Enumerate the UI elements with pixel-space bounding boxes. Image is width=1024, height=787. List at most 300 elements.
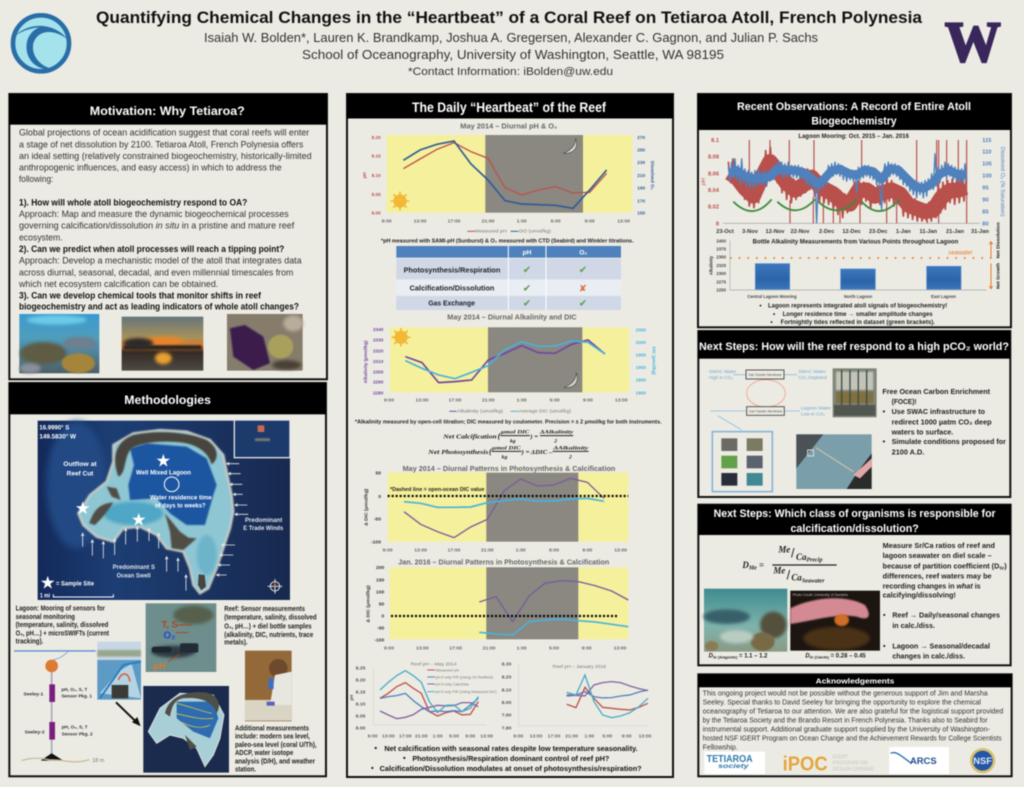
authors and affiliation: Isaiah W. Bolden*, Lauren K. Brandkamp, Joshua A. Gregersen, Alexander C. Gagnon, and Julian P. Sachs xyxy=(204,31,818,45)
chart: reef pH May 2014: Measured pH xyxy=(436,668,459,672)
logo: IPOC: PROGRAM ON xyxy=(833,761,868,767)
text block: motivation questions: 2). Can we predict when atoll processes will reach a tipping point? xyxy=(19,244,285,254)
chart: May 2014 diurnal alkalinity and DIC: 1850 xyxy=(636,378,646,383)
chart: lagoon mooring time series: 8.06 xyxy=(708,171,719,177)
text block: Sr/Ca ratios xyxy=(883,541,1007,660)
text block: lagoon mooring: tracking). xyxy=(16,638,43,645)
arrow: net growth xyxy=(989,263,993,289)
map labels: of days to weeks? xyxy=(155,502,206,509)
text block: additional measurements: station. xyxy=(235,767,256,774)
chart: reef pH May 2014: 8.15 xyxy=(356,689,366,695)
text block: additional measurements: include: modern sea level, xyxy=(235,734,310,741)
table: process sensitivity: O₂ xyxy=(579,250,587,257)
chart: reef pH January 2016: 8.10 xyxy=(502,687,512,693)
equation: partition coefficient: / xyxy=(787,568,791,582)
chart: lagoon mooring time series: 1-Jan xyxy=(896,229,911,235)
text block: Sr/Ca ratios: Sr xyxy=(999,565,1004,570)
equations: net calcification and net photosynthesis: kg xyxy=(502,454,507,460)
chart: bottle alkalinity bars: seawater xyxy=(948,251,974,257)
chart: reef pH May 2014: 8.10 xyxy=(356,702,366,708)
text block: Sr/Ca ratios: Reef → Daily/seasonal changes xyxy=(892,611,1000,620)
chart: lagoon mooring time series: 3-Nov xyxy=(742,229,759,235)
chart: lagoon mooring time series: Dissolved O₂ (% Saturation) xyxy=(999,147,1005,217)
chart: January 2016 photosynthesis and calcification: 13:00 xyxy=(614,645,627,651)
equations: net calcification and net photosynthesis xyxy=(427,430,589,460)
icon: circulation circle xyxy=(164,477,179,492)
table: process sensitivity: pH xyxy=(523,250,532,257)
photo: reef sensors: O₂ xyxy=(163,630,176,641)
equation: partition coefficient: Ca xyxy=(796,552,806,562)
chart: reef pH January 2016: 1:00 xyxy=(584,733,595,739)
text block: motivation questions: a stage of net dissolution by 2100. Tetiaroa Atoll, French Polynesia offers xyxy=(19,140,304,150)
chart: lagoon mooring time series: 90 xyxy=(982,197,989,203)
text block: Sr/Ca ratios: ) xyxy=(1004,561,1007,570)
chart: lagoon mooring time series: 8.1 xyxy=(711,138,719,144)
text block: Sr/Ca ratios: calcifying/dissolving! xyxy=(883,591,956,600)
map: Tetiaroa atoll satellite image xyxy=(38,420,290,600)
heading: high pCO2 world xyxy=(698,331,1010,359)
chart: May 2014 diurnal pH and O2: 170 xyxy=(637,198,645,203)
chart: lagoon mooring time series xyxy=(701,133,1005,235)
panel: next steps organisms xyxy=(698,505,1011,665)
chart: May 2014 diurnal pH and O2: 210 xyxy=(637,173,645,178)
chart: bottle alkalinity bars: 2250 xyxy=(716,288,727,293)
inset map xyxy=(234,420,290,458)
chart: May 2014 diurnal pH and O2: 8.15 xyxy=(372,154,381,159)
caption: photo partition coefficients: D xyxy=(709,654,714,660)
chart: reef pH May 2014: 21:00 xyxy=(415,733,428,739)
photo: researcher in lab xyxy=(245,651,292,721)
chart: May 2014 diurnal alkalinity and DIC: 17:00 xyxy=(449,398,462,404)
heading: daily heartbeat xyxy=(347,94,673,118)
panel: methodologies xyxy=(9,383,326,776)
chart: May 2014 diurnal pH and O2: 8.05 xyxy=(372,192,381,197)
chart: May 2014 photosynthesis and calcification xyxy=(364,466,628,553)
equation: partition coefficient: Me xyxy=(777,545,790,555)
text block: FOCE xyxy=(882,387,1006,456)
map labels: Water residence time xyxy=(150,495,212,502)
text block: reef sensors: (temperature, salinity, dissolved xyxy=(224,615,317,622)
text block: motivation questions: Approach: Develop a mechanistic model of the atoll that integrates data xyxy=(19,256,302,266)
heading: acknowledgements xyxy=(698,674,1012,687)
text block: motivation questions: 1). How will whole atoll biogeochemistry respond to OA? xyxy=(19,197,248,207)
chart: reef pH May 2014: 9:00 xyxy=(465,733,476,739)
chart: bottle alkalinity bars: 2325 xyxy=(716,263,727,268)
chart: May 2014 photosynthesis and calcification: 50 xyxy=(375,470,381,476)
text block: acknowledgements: Fellowship. xyxy=(703,743,738,752)
chart: lagoon mooring time series: 12-Nov xyxy=(766,229,785,235)
text block: motivation questions: biogeochemistry and act as leading indicators of whole atoll changes? xyxy=(19,302,299,312)
text block: acknowledgements: instrumental support. Additional graduate support supplied by the University of Washington- xyxy=(703,725,991,734)
chart: May 2014 diurnal pH and O2: 8.00 xyxy=(372,211,381,216)
photo: lagoon survey map xyxy=(143,686,229,773)
text block: FOCE: Use SWAC infrastructure to xyxy=(892,407,985,416)
heading: recent observations xyxy=(698,94,1011,130)
icon: scale bar xyxy=(53,594,113,597)
chart: May 2014 diurnal pH and O2: 5:00 xyxy=(551,219,561,225)
chart: January 2016 photosynthesis and calcification: Δ DIC (µmol/kg) xyxy=(365,585,371,623)
chart: reef pH May 2014: 1:00 xyxy=(433,733,443,739)
photo: experimental rack xyxy=(833,368,877,417)
chart: bottle alkalinity bars: Alkalinity xyxy=(709,255,714,275)
text block: motivation questions: 3). Can we develop chemical tools that monitor shifts in reef xyxy=(19,291,262,301)
panel: daily heartbeat of the reef xyxy=(347,94,673,777)
chart: lagoon mooring time series: Lagoon Mooring: Oct. 2015 – Jan. 2016 xyxy=(798,133,909,140)
logo: ARCS: ARCS xyxy=(910,756,937,766)
photo: purple and brown coral xyxy=(227,314,303,371)
chart: lagoon mooring time series: 2-Dec xyxy=(819,229,834,235)
text block: lagoon takeaways: • xyxy=(770,319,773,326)
chart: lagoon mooring time series: 8.04 xyxy=(708,188,720,194)
chart: bottle alkalinity bars: 2400 xyxy=(716,238,727,243)
text block: lagoon mooring: Lagoon: Mooring of sensors for xyxy=(16,606,105,613)
chart: January 2016 photosynthesis and calcification: Jan. 2016 – Diurnal Patterns in Photosynthesis & Calcification xyxy=(398,559,609,566)
diagram: gas transfer loop: SWAC Water xyxy=(798,369,826,374)
text block: Sr/Ca ratios: changes in calc./diss. xyxy=(892,651,965,660)
map labels: Predominant xyxy=(245,517,283,524)
icon: sample site stars: ★ xyxy=(75,498,90,518)
text block: motivation questions: following: xyxy=(19,174,53,184)
diagram: mooring xyxy=(14,651,105,764)
icon: wave logo xyxy=(13,15,69,71)
diagram: FOCE enclosure xyxy=(712,416,772,492)
text block: reef sensors: Reef: Sensor measurements xyxy=(224,606,305,613)
chart: reef pH January 2016: 5:00 xyxy=(602,733,613,739)
chart: lagoon mooring time series: 8.08 xyxy=(708,155,719,161)
chart: May 2014 diurnal alkalinity and DIC: 2320 xyxy=(373,348,384,353)
chart: May 2014 diurnal alkalinity and DIC: 9:00 xyxy=(384,398,394,404)
heading: motivation: Motivation: Why Tetiaroa? xyxy=(90,105,245,118)
chart: reef pH January 2016: 21:00 xyxy=(565,733,578,739)
equations: net calcification and net photosynthesis: Net Photosynthesis xyxy=(427,450,489,456)
chart: January 2016 photosynthesis and calcification: 17:00 xyxy=(449,645,462,651)
text block: FOCE: (FOCE)! xyxy=(892,397,917,406)
chart: May 2014 photosynthesis and calcification: 13:00 xyxy=(414,547,427,553)
chart: May 2014 diurnal alkalinity and DIC: 2340 xyxy=(373,327,384,332)
text block: lagoon takeaways: • xyxy=(773,311,776,318)
note: alkalinity methods: *Alkalinity measured by open-cell titration; DIC measured by coulometer. Precision = ± 2 µmol/kg for both instruments. xyxy=(355,419,662,425)
table: process sensitivity: ✔ xyxy=(523,265,531,276)
chart: reef pH January 2016: 8.00 xyxy=(502,700,512,706)
chart: May 2014 diurnal pH and O2: 190 xyxy=(637,186,645,191)
equation: partition coefficient: D xyxy=(742,560,749,570)
chart: reef pH January 2016 xyxy=(502,662,652,739)
authors and affiliation: *Contact Information: iBolden@uw.edu xyxy=(408,66,613,78)
chart: reef pH January 2016: 9:00 xyxy=(513,733,524,739)
chart: May 2014 diurnal pH and O2: 230 xyxy=(637,160,645,165)
diagram: mooring: Sensor Pkg. 1 xyxy=(61,694,92,700)
icon: sample site stars xyxy=(40,451,171,593)
text block: additional measurements: ADCP, water isotope xyxy=(235,750,293,757)
chart: bottle alkalinity bars: North Lagoon xyxy=(844,294,873,299)
chart: January 2016 photosynthesis and calcification: -50 xyxy=(377,626,385,632)
chart: May 2014 diurnal alkalinity and DIC: 1:00 xyxy=(517,398,527,404)
text block: acknowledgements: by the Tetiaroa Society and the Brando Resort in French Polynesia. Thanks also to Seabird for xyxy=(703,716,988,725)
chart: May 2014 diurnal alkalinity and DIC: 2330 xyxy=(373,338,384,343)
text block: reef sensors: O₂, pH…) + diel bottle samples xyxy=(224,623,312,630)
text block: heartbeat takeaways: Net calcification with seasonal rates despite low temperature seasonality. xyxy=(384,744,638,753)
equations: net calcification and net photosynthesis: ΔAlkalinity xyxy=(552,445,589,451)
chart: reef pH January 2016: 7.80 xyxy=(502,725,512,731)
icon: sample site stars: ★ xyxy=(156,451,171,471)
text block: reef sensors: metals). xyxy=(224,640,248,647)
chart: bottle alkalinity bars xyxy=(709,222,1001,299)
text block: heartbeat takeaways: • xyxy=(403,754,406,763)
chart: May 2014 diurnal alkalinity and DIC: 2310 xyxy=(373,359,384,364)
chart: reef pH May 2014: pH if only P/R (Using O2 Redfield) xyxy=(436,675,493,679)
chart: May 2014 diurnal alkalinity and DIC: 1900 xyxy=(636,365,646,370)
equations: net calcification and net photosynthesis: µmol DIC xyxy=(500,430,530,436)
heading: which class of organisms: calcification/dissolution? xyxy=(790,523,919,535)
chart: May 2014 diurnal pH and O2: 8.20 xyxy=(372,135,381,140)
text block: additional measurements: Additional measurements xyxy=(235,725,309,732)
text block: acknowledgements: Seeley. Special thanks to David Seeley for bringing the opportunity to explore the chemical xyxy=(703,697,981,706)
map labels: = Sample Site xyxy=(56,580,94,587)
chart: reef pH May 2014: 9:00 xyxy=(368,733,378,739)
photo: sunset over lagoon xyxy=(122,317,203,371)
chart: May 2014 diurnal pH and O2: Measured pH xyxy=(475,229,507,234)
diagram: mooring: Seeley-2 xyxy=(25,729,45,735)
chart: May 2014 photosynthesis and calcification: 21:00 xyxy=(481,547,494,553)
equation: partition coefficient: Precip xyxy=(806,558,822,564)
chart: January 2016 photosynthesis and calcification: 150 xyxy=(376,578,385,584)
icon: sample site stars: ★ xyxy=(131,509,146,529)
text block: motivation questions: which net ecosystem calcification can be obtained. xyxy=(18,279,218,289)
chart: January 2016 photosynthesis and calcification: 5:00 xyxy=(549,645,559,651)
heading: daily heartbeat: The Daily “Heartbeat” of the Reef xyxy=(412,100,606,115)
chart: lagoon mooring time series: 115 xyxy=(982,138,991,144)
chart: May 2014 photosynthesis and calcification: -50 xyxy=(374,516,381,522)
photo: aerial reef view xyxy=(796,434,872,489)
chart: bottle alkalinity bars: Bottle Alkalinity Measurements from Various Points throughout Lagoon xyxy=(753,239,958,246)
text block: lagoon takeaways: Lagoon represents integrated atoll signals of biogeochemistry! xyxy=(768,302,947,309)
equations: net calcification and net photosynthesis: ( xyxy=(489,447,493,456)
table: process sensitivity: ✔ xyxy=(579,265,587,276)
text block: motivation questions: an ideal setting (relatively constrained biogeochemistry, historically-limited xyxy=(19,151,312,161)
chart: May 2014 diurnal alkalinity and DIC: 2050 xyxy=(636,328,646,333)
text block: FOCE: redirect 1000 µatm CO₂ deep xyxy=(892,417,992,426)
text block: lagoon mooring: seasonal monitoring xyxy=(16,614,75,621)
text block: motivation questions: anthropogenic influences, and easy access) in which to address the xyxy=(19,162,282,172)
arrow: to lagoon map xyxy=(116,702,141,726)
chart: May 2014 diurnal alkalinity and DIC: Alkalinity (µmol/kg) xyxy=(363,340,368,383)
map labels: Reef Cut xyxy=(67,470,94,477)
logo: Tetiaroa Society xyxy=(704,752,765,774)
land xyxy=(115,432,217,477)
text block: Sr/Ca ratios: Measure Sr/Ca ratios of reef and xyxy=(883,541,995,550)
icon: University of Washington W logo: W xyxy=(945,11,1001,74)
table: process sensitivity: Calcification/Dissolution xyxy=(410,283,495,292)
text block: additional measurements xyxy=(235,725,317,774)
chart: January 2016 photosynthesis and calcification: -100 xyxy=(374,638,385,644)
chart: lagoon mooring time series: 80 xyxy=(982,221,989,227)
caption: photo partition coefficients: = 1.1 – 1.2 xyxy=(737,654,768,660)
chart: reef pH May 2014: 13:00 xyxy=(480,733,493,739)
chart: lagoon mooring time series: 23-Dec xyxy=(869,229,888,235)
chart: May 2014 diurnal alkalinity and DIC: 5:00 xyxy=(550,398,560,404)
text block: FOCE: Simulate conditions proposed for xyxy=(892,437,1006,446)
chart: May 2014 photosynthesis and calcification: -100 xyxy=(371,539,381,545)
chart: May 2014 diurnal pH and O2 xyxy=(362,124,655,234)
text block: Sr/Ca ratios: because of partition coefficient (D xyxy=(883,561,1001,570)
chart: bottle alkalinity bars: 2350 xyxy=(716,255,727,260)
text block: FOCE: • xyxy=(883,437,886,446)
map labels: 1 mi xyxy=(40,592,50,599)
chart: May 2014 diurnal pH and O2: 13:00 xyxy=(617,219,630,225)
chart: May 2014 diurnal pH and O2: 150 xyxy=(637,211,645,216)
diagram: gas transfer loop: CO₂ Depleted xyxy=(798,375,827,380)
panel: motivation xyxy=(9,94,327,379)
chart: May 2014 diurnal alkalinity and DIC: 2290 xyxy=(373,380,384,385)
diagram: gas transfer loop: Gas Transfer Membrane xyxy=(748,373,782,377)
text block: lagoon mooring: O₂, pH…) + microSWIFTs (current xyxy=(16,630,110,637)
arrows: ocean swell xyxy=(81,527,187,591)
equations: net calcification and net photosynthesis: 2 xyxy=(568,454,572,460)
chart: May 2014 diurnal alkalinity and DIC xyxy=(363,314,656,414)
chart: reef pH May 2014: pH xyxy=(349,695,354,701)
reef flat xyxy=(78,430,233,593)
logo: IPOC: OCEAN CHANGE xyxy=(833,767,874,773)
equations: net calcification and net photosynthesis: kg xyxy=(510,438,516,444)
text block: Sr/Ca ratios: lagoon seawater on diel scale – xyxy=(883,551,992,560)
text block: motivation questions: ecosystem. xyxy=(19,233,63,243)
logo: NSF: NSF xyxy=(973,756,992,766)
chart: bottle alkalinity bars: Net Dissolution xyxy=(995,222,1001,258)
equations: net calcification and net photosynthesis: 2 xyxy=(553,439,557,445)
chart: lagoon mooring time series: 95 xyxy=(982,185,989,191)
chart: lagoon mooring time series: 23-Oct xyxy=(716,229,734,235)
equations: net calcification and net photosynthesis: ) = ΔDIC – xyxy=(521,449,553,456)
text block: reef sensors: (alkalinity, DIC, nutrients, trace xyxy=(224,632,313,639)
map labels: Outflow at xyxy=(63,461,98,468)
diagram: gas transfer loop: SWAC Water xyxy=(709,369,737,374)
diagram: mooring: pH, O₂, S, T xyxy=(62,724,88,730)
diagram: gas transfer loop: Low in CO₂ xyxy=(801,412,825,417)
text block: Sr/Ca ratios: • xyxy=(883,641,886,650)
text block: heartbeat takeaways: Photosynthesis/Respiration dominant control of reef pH? xyxy=(412,754,610,763)
chart: May 2014 photosynthesis and calcification: 0 xyxy=(378,494,381,500)
chart: May 2014 diurnal pH and O2: Dissolved O₂ xyxy=(650,161,655,190)
text block: FOCE: Free Ocean Carbon Enrichment xyxy=(882,387,991,396)
map labels xyxy=(39,423,284,599)
icon: compass xyxy=(268,579,282,594)
chart: May 2014 photosynthesis and calcification: 5:00 xyxy=(549,547,559,553)
table: process sensitivity: ✔ xyxy=(523,283,531,294)
table: process sensitivity: ✔ xyxy=(579,298,587,309)
text block: lagoon mooring: (temperature, salinity, dissolved xyxy=(16,622,108,629)
text block: lagoon takeaways: Longer residence time → smaller amplitude changes xyxy=(783,311,933,318)
chart: lagoon mooring time series: 22-Nov xyxy=(791,229,810,235)
diagram: gas transfer loop: High in CO₂ xyxy=(709,375,733,380)
chart: May 2014 diurnal alkalinity and DIC: 1800 xyxy=(636,390,646,395)
chart: May 2014 photosynthesis and calcification: Δ DIC (µmol/kg) xyxy=(364,488,370,526)
icon: sun xyxy=(392,328,410,347)
icon: moon xyxy=(563,138,577,153)
chart: January 2016 photosynthesis and calcification: 200 xyxy=(376,565,385,571)
arrows: trade winds xyxy=(217,462,248,576)
logo: ARCS xyxy=(889,747,949,774)
photo: boat deployment xyxy=(97,642,141,700)
chart: May 2014 diurnal alkalinity and DIC: Alkalinity (umol/kg) xyxy=(457,409,504,414)
chart: bottle alkalinity bars: 2300 xyxy=(716,271,727,276)
equation: partition coefficient: Me xyxy=(748,566,757,572)
icon: sun xyxy=(391,192,409,210)
chart: bottle alkalinity bars: Central Lagoon Mooring xyxy=(747,294,797,299)
diagram: gas transfer loop: Lagoon Water xyxy=(801,406,831,411)
chart: reef pH May 2014: pH if only P/R (Using Measured DIC) xyxy=(436,690,497,694)
text block: acknowledgements: This ongoing project would not be possible without the generous support of Jim and Marsha xyxy=(703,688,989,697)
chart: reef pH May 2014: Reef pH – May 2014 xyxy=(411,661,457,666)
chart: January 2016 photosynthesis and calcification: 9:00 xyxy=(384,645,394,651)
note: pH and O2 methods: *pH measured with SAMI-pH (Sunburst) & O₂ measured with CTD (Seabird) and Winkler titrations. xyxy=(381,239,634,245)
heading: acknowledgements: Acknowledgements xyxy=(816,677,894,686)
equations: net calcification and net photosynthesis: ) = xyxy=(529,434,538,441)
chart: May 2014 diurnal pH and O2: 9:00 xyxy=(585,219,595,225)
equations: net calcification and net photosynthesis: ΔAlkalinity xyxy=(539,430,574,436)
table: process sensitivity: ✔ xyxy=(523,298,531,309)
chart: May 2014 diurnal alkalinity and DIC: 13:00 xyxy=(416,398,429,404)
text block: lagoon mooring xyxy=(16,606,110,645)
equations: net calcification and net photosynthesis: Net Calcification xyxy=(442,435,497,441)
arrow: net dissolution xyxy=(989,242,993,258)
caption: photo partition coefficients: Sr (Aragonite) xyxy=(713,656,738,660)
chart: May 2014 diurnal pH and O2: 1:00 xyxy=(517,219,527,225)
chart: reef pH January 2016: 7.90 xyxy=(502,713,512,719)
heading: recent observations: Biogeochemistry xyxy=(811,115,897,127)
chart: reef pH May 2014: 5:00 xyxy=(449,733,459,739)
text block: acknowledgements: oceanography of Tetiaroa to our attention. We are also grateful for the logistical support provided xyxy=(703,707,1003,716)
title: Quantifying Chemical Changes in the “Heartbeat” of a Coral Reef on Tetiaroa Atoll, French Polynesia xyxy=(96,8,923,27)
logo: NSF xyxy=(970,748,995,773)
text block: heartbeat takeaways: Calcification/Dissolution modulates at onset of photosynthesis/respiration? xyxy=(380,764,642,773)
chart: lagoon mooring time series: 105 xyxy=(982,161,992,167)
chart: January 2016 photosynthesis and calcification: 21:00 xyxy=(483,645,496,651)
chart: reef pH May 2014: 8.00 xyxy=(356,725,366,731)
text block: Sr/Ca ratios: differences, reef waters may be xyxy=(883,571,992,580)
icon: sample site stars: ★ xyxy=(40,573,55,593)
chart: reef pH May 2014 xyxy=(349,661,497,739)
text block: motivation questions: governing calcification/dissolution in situ in a pristine and mature reef xyxy=(19,221,295,231)
chart: May 2014 diurnal alkalinity and DIC: 9:00 xyxy=(583,398,593,404)
equation: partition coefficient xyxy=(741,545,837,584)
chart: May 2014 diurnal alkalinity and DIC: 13:00 xyxy=(615,398,628,404)
text block: additional measurements: analysis (D/H), and weather xyxy=(235,758,315,765)
chart: May 2014 photosynthesis and calcification: 13:00 xyxy=(614,547,627,553)
chart: May 2014 diurnal pH and O2: pH xyxy=(362,172,367,178)
chart: January 2016 photosynthesis and calcification: 100 xyxy=(376,590,385,596)
text block: acknowledgements: hosted NSF IGERT Program on Ocean Change and the Achievement Rewards for College Scientists xyxy=(703,734,1002,743)
chart: lagoon mooring time series: 85 xyxy=(982,210,989,216)
table: process sensitivity: Gas Exchange xyxy=(428,298,475,307)
chart: May 2014 diurnal pH and O2: DO (umol/kg) xyxy=(519,229,552,234)
chart: May 2014 diurnal pH and O2: 250 xyxy=(637,148,645,153)
heading: recent observations: Recent Observations: A Record of Entire Atoll xyxy=(737,101,971,113)
diagram: mooring: Seeley-1 xyxy=(23,692,44,698)
chart: reef pH May 2014: 8.20 xyxy=(356,678,366,684)
equations: net calcification and net photosynthesis: ( xyxy=(498,432,502,441)
logo: IPOC xyxy=(783,753,874,776)
chart: May 2014 diurnal pH and O2: 9:00 xyxy=(382,219,392,225)
caption: photo partition coefficients: = 0.28 – 0.45 xyxy=(829,654,866,660)
logo: IPOC: IGERT xyxy=(833,755,849,761)
chart: May 2014 photosynthesis and calcification: *Dashed line = open-ocean DIC value xyxy=(390,487,484,493)
chart: January 2016 photosynthesis and calcification xyxy=(365,559,628,651)
photo: aragonite coral xyxy=(703,589,787,652)
chart: May 2014 photosynthesis and calcification: 9:00 xyxy=(383,547,393,553)
chart: May 2014 diurnal alkalinity and DIC: 2300 xyxy=(373,369,384,374)
chart: reef pH January 2016: 13:00 xyxy=(530,733,543,739)
map labels: 149.5830° W xyxy=(39,432,76,440)
